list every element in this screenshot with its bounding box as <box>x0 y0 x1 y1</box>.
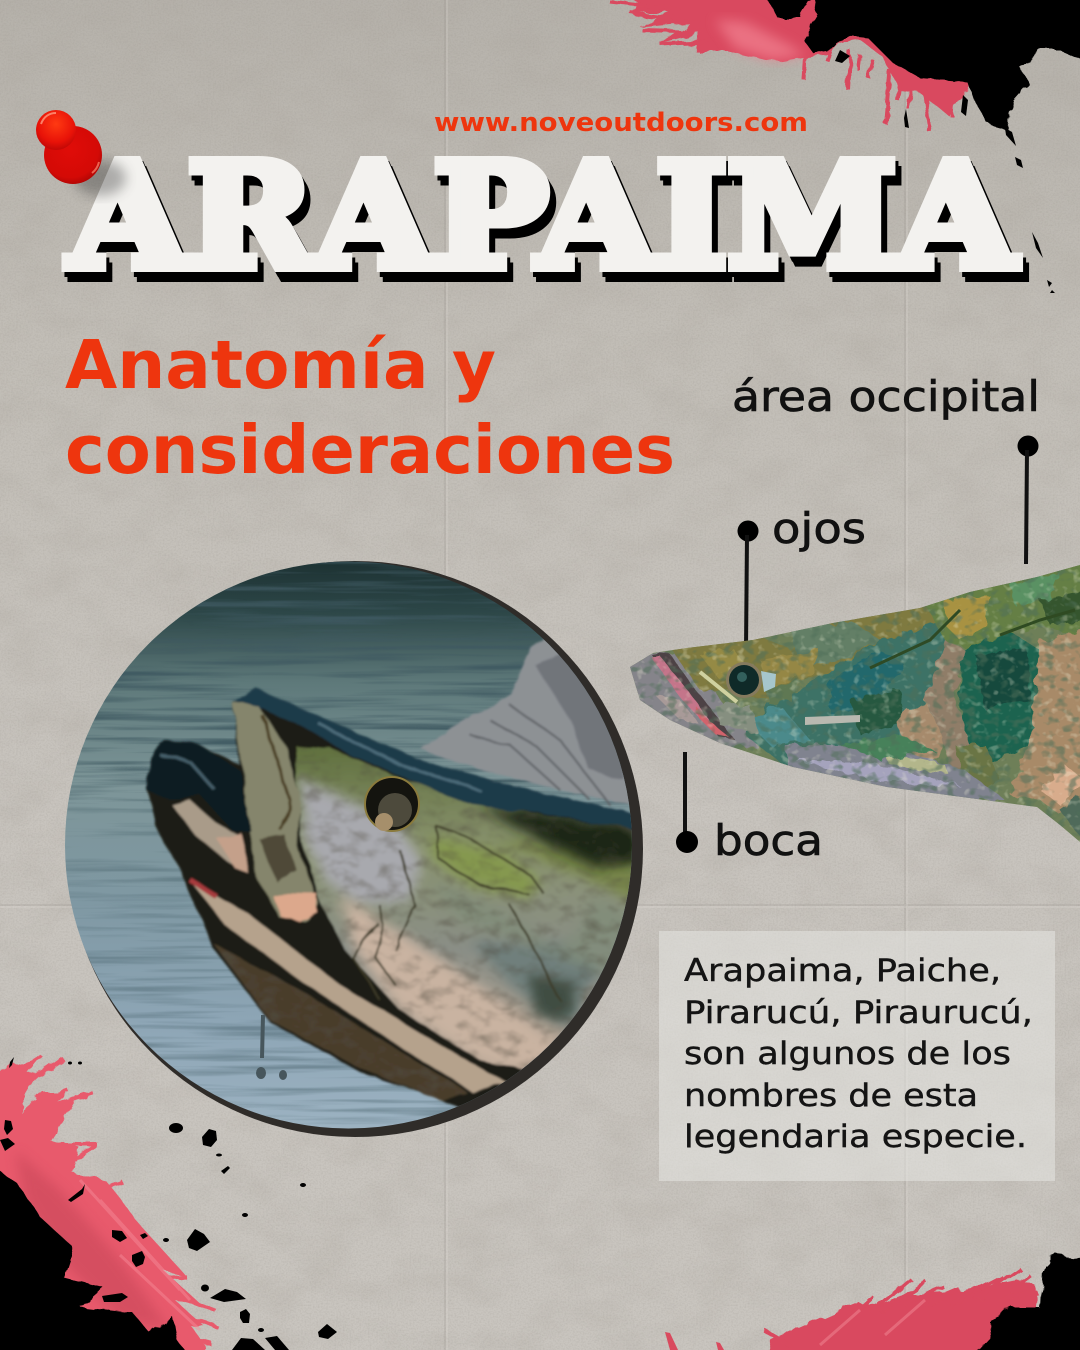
text panel: names of the species: legendaria especie. <box>684 1119 1027 1155</box>
bottom-right ink and red brush corner <box>665 1255 1080 1350</box>
heading: Anatomía y consideraciones: consideraciones <box>65 411 675 489</box>
text panel: names of the species: Arapaima, Paiche, <box>684 953 1001 989</box>
text panel: names of the species: Pirarucú, Piraurucú, <box>684 995 1033 1031</box>
photo eye <box>365 777 419 831</box>
illustrated arapaima head <box>625 560 1080 850</box>
heading: Anatomía y consideraciones <box>65 326 675 489</box>
bottom-left ink and red brush corner <box>0 1054 337 1350</box>
heading: Anatomía y consideraciones: Anatomía y <box>65 326 496 404</box>
website url: www.noveoutdoors.com <box>434 108 808 138</box>
text panel: names of the species <box>659 931 1055 1181</box>
angler sleeve <box>420 636 632 805</box>
title: ARAPAIMA with extruded shadow: ARAPAIMA <box>66 132 1018 300</box>
fish eye <box>726 662 776 698</box>
callout: ojos <box>738 504 866 650</box>
top-right ink and red brush corner <box>610 0 1080 293</box>
callout: área occipital: área occipital <box>732 372 1040 421</box>
title: ARAPAIMA with extruded shadow: ARAPAIMA <box>72 142 1024 310</box>
callout: boca: boca <box>714 816 823 865</box>
text panel: names of the species: son algunos de los <box>684 1036 1011 1072</box>
fish head and body <box>147 688 640 1108</box>
callout: área occipital <box>732 372 1040 564</box>
title: ARAPAIMA with extruded shadow: ARAPAIMA <box>69 136 1021 306</box>
icon: red push pin <box>36 110 126 196</box>
water droplets <box>256 1015 287 1080</box>
text panel: names of the species: nombres de esta <box>684 1078 978 1114</box>
callout: boca <box>676 752 823 865</box>
callout: ojos: ojos <box>772 504 866 553</box>
circular photo of arapaima <box>60 555 643 1137</box>
